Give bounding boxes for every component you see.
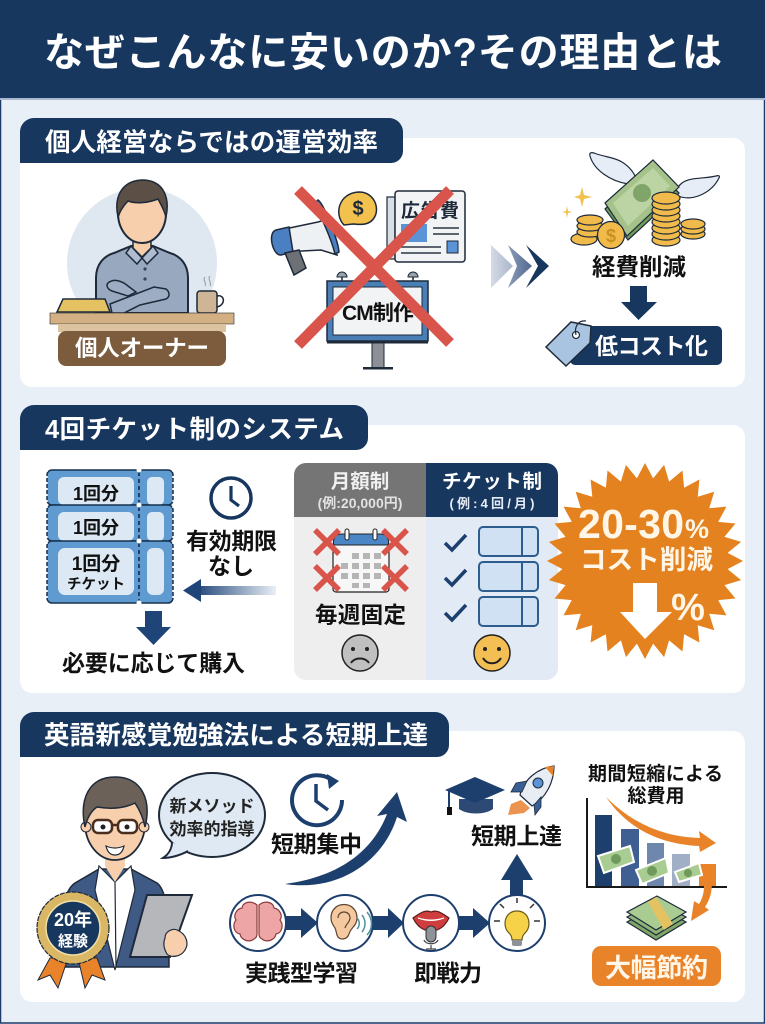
- icon: flying money and coins: $: [606, 226, 616, 246]
- text: 期間短縮による総費用: [588, 763, 723, 807]
- badge: 20年経験 medal: 経験: [58, 933, 88, 950]
- badge: 20年経験 medal: [37, 892, 109, 988]
- badge: 大幅節約: 大幅節約: [605, 953, 708, 983]
- arrow: up: [501, 854, 533, 897]
- icon: stacked tickets: [46, 468, 174, 606]
- icon: clock with arrow: [292, 774, 342, 825]
- icon: ear with sound waves: [317, 895, 373, 951]
- arrow: down: [621, 286, 657, 320]
- panel: 英語新感覚勉強法による短期上達: [20, 712, 745, 1002]
- process arrows: [286, 908, 490, 938]
- badge: 20-30% cost reduction starburst: 20-30: [578, 501, 684, 547]
- column: 月額制: 毎週固定: [315, 603, 406, 628]
- badge: 低コスト化: 低コスト化: [595, 333, 708, 359]
- speech bubble: 新メソッド 効率的指導: [159, 773, 265, 858]
- icon: stacked tickets: 1回分: [73, 518, 119, 538]
- arrow: down: [136, 611, 171, 645]
- panel: 個人経営ならではの運営効率: [20, 118, 745, 387]
- chart: decreasing total cost bars: [587, 797, 727, 887]
- icon: megaphone: [272, 200, 339, 275]
- column: チケット制: [442, 471, 542, 671]
- comparison table: [294, 463, 558, 680]
- illustration: individual owner at desk: [50, 180, 234, 338]
- icon: stacked tickets: 1回分: [73, 484, 119, 504]
- column: チケット制: (例:4回/月): [450, 496, 534, 511]
- badge: 低コスト化: [546, 321, 722, 366]
- illustration: teacher with tablet: [60, 777, 192, 970]
- icon: stacked tickets: チケット: [67, 576, 125, 593]
- icon: stacked tickets: 1回分: [72, 553, 120, 575]
- speech bubble: 新メソッド 効率的指導: 新メソッド: [170, 797, 254, 816]
- icon: dollar bubble: $: [352, 198, 364, 220]
- icon: lips and microphone: [403, 895, 459, 951]
- badge: 大幅節約: [592, 946, 721, 986]
- text: 期間短縮による総費用: 総費用: [627, 785, 685, 807]
- heading: section 1: [20, 118, 403, 163]
- heading: section 3: [20, 712, 449, 757]
- panel: 4回チケット制のシステム: [20, 405, 745, 693]
- column: 月額制: (例:20,000円): [318, 495, 402, 511]
- badge: 20年経験 medal: 20年: [54, 909, 92, 930]
- icon: tickets: [479, 527, 538, 626]
- text: 短期集中: 短期集中: [271, 831, 362, 857]
- text: 実践型学習: 実践型学習: [245, 960, 358, 986]
- title banner: [0, 0, 765, 100]
- arrow: orange downtrend: [606, 797, 716, 852]
- heading: section 1: 個人経営ならではの運営効率: [45, 129, 378, 157]
- speech bubble: 新メソッド 効率的指導: 効率的指導: [170, 820, 254, 839]
- heading: section 2: [20, 405, 368, 450]
- icon: cash bundle: [627, 896, 686, 940]
- badge: 20-30% cost reduction starburst: %: [671, 587, 705, 629]
- badge: 20-30% cost reduction starburst: [547, 463, 743, 659]
- arrow: orange curve to savings: [691, 878, 712, 921]
- icon: checks: [445, 535, 466, 620]
- arrow: left gradient: [183, 579, 276, 602]
- icon: flying money and coins: [562, 153, 719, 248]
- arrow: rising curve: [285, 792, 407, 885]
- text: 短期上達: 短期上達: [471, 823, 562, 849]
- text: 即戦力: 即戦力: [414, 960, 482, 986]
- text: 経費削減: 経費削減: [592, 254, 686, 280]
- icon: sad face: [342, 635, 378, 671]
- text: 期間短縮による総費用: 期間短縮による: [588, 763, 723, 785]
- icon: light bulb: [489, 895, 545, 951]
- icon: red cross-out: [298, 190, 450, 345]
- badge: 20-30% cost reduction starburst: %: [685, 514, 709, 544]
- icon: newspaper 広告費: 広告費: [401, 200, 459, 222]
- heading: section 3: 英語新感覚勉強法による短期上達: [44, 722, 428, 750]
- text: 必要に応じて購入: 必要に応じて購入: [62, 650, 245, 676]
- icon: newspaper 広告費: [387, 191, 465, 262]
- badge: 20-30% cost reduction starburst: コスト削減: [580, 545, 714, 575]
- icon: clock: [211, 478, 251, 518]
- text: 有効期限なし: [186, 528, 277, 579]
- icon: graduation cap: [445, 777, 505, 815]
- column: 月額制: 月額制: [331, 471, 389, 493]
- icon: crossed-out calendar: [315, 529, 407, 592]
- title banner: なぜこんなに安いのか?その理由とは: [44, 31, 722, 75]
- text: 有効期限なし: 有効期限: [186, 528, 277, 554]
- icon: rocket: [508, 766, 554, 815]
- icon: dollar bubble: [339, 192, 376, 225]
- icon: brain: [230, 895, 286, 951]
- label: 個人オーナー: 個人オーナー: [75, 336, 209, 361]
- icon: billboard CM制作: [327, 272, 428, 370]
- label: 個人オーナー: [58, 331, 226, 366]
- column: 月額制: [315, 471, 407, 671]
- icon: floating bills: [598, 846, 702, 884]
- arrow: triple chevron: [491, 245, 549, 288]
- text: 有効期限なし: なし: [208, 553, 254, 579]
- column: チケット制: チケット制: [442, 471, 542, 493]
- heading: section 2: 4回チケット制のシステム: [45, 416, 344, 444]
- icon: smile face: [474, 635, 510, 671]
- icon: billboard CM制作: CM制作: [342, 302, 414, 325]
